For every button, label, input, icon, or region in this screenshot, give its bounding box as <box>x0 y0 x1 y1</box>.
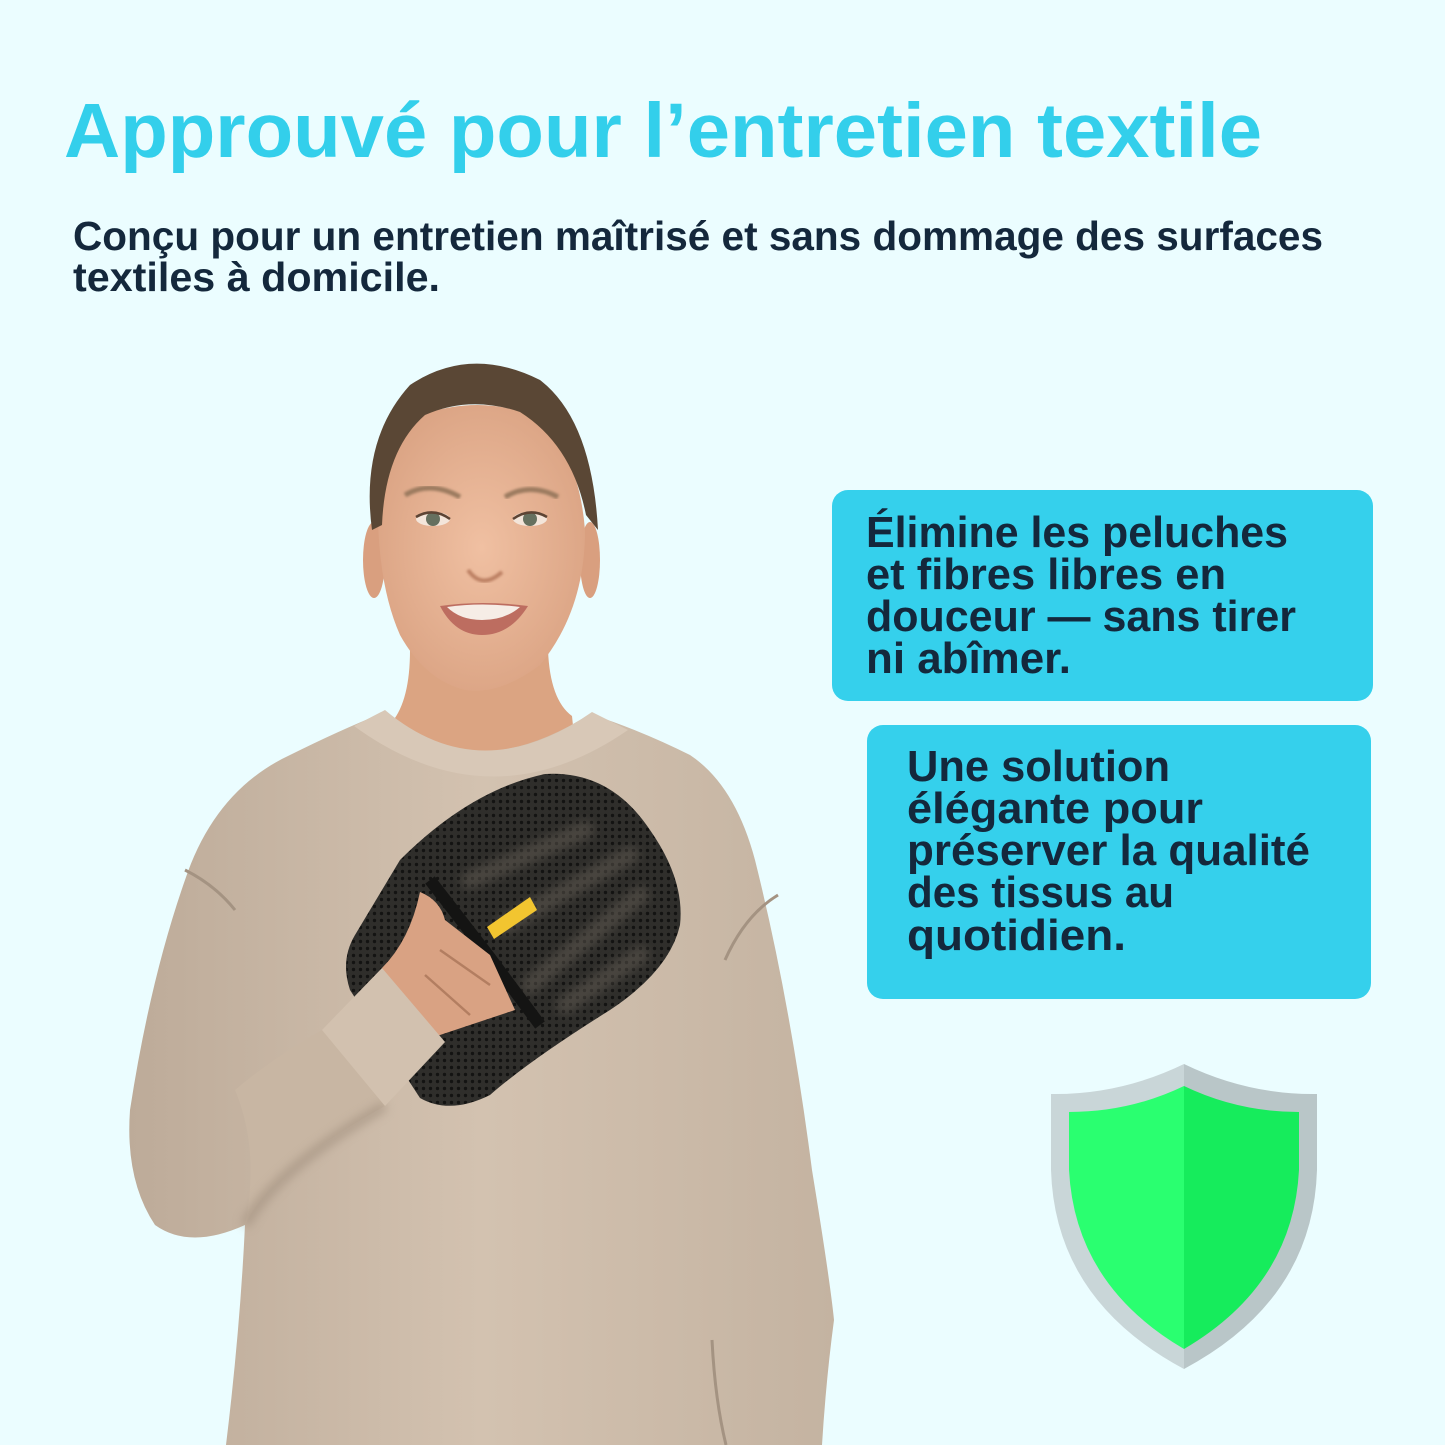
subtitle <box>73 213 1323 300</box>
photo: woman wearing the textile care mitt <box>129 364 834 1445</box>
face <box>378 405 585 691</box>
hair <box>370 364 598 530</box>
mitt strap <box>430 880 540 1025</box>
yellow tab <box>487 897 537 939</box>
subtitle: textiles à domicile. <box>73 254 440 300</box>
cuff <box>322 968 445 1106</box>
icon: green shield <box>1051 1064 1317 1369</box>
mitt finger highlights <box>470 830 640 1005</box>
sweatshirt <box>129 712 834 1445</box>
neck <box>392 650 575 768</box>
mitt <box>346 774 681 1106</box>
subtitle: Conçu pour un entretien maîtrisé et sans dommage des surfaces <box>73 213 1323 259</box>
callout: solution: quotidien. <box>907 911 1126 960</box>
mouth <box>440 603 528 635</box>
title: Approuvé pour l’entretien textile <box>64 88 1262 174</box>
hand knuckle lines <box>425 950 490 1015</box>
callout: peluches: douceur — sans tirer <box>866 592 1296 641</box>
callout: peluches: ni abîmer. <box>866 634 1071 683</box>
callout: peluches: et fibres libres en <box>866 550 1226 599</box>
callout: solution: préserver la qualité <box>907 826 1310 875</box>
callout: solution: Une solution <box>907 742 1170 791</box>
callout: peluches <box>832 490 1373 701</box>
brows <box>405 488 558 497</box>
callout: solution: des tissus au <box>907 868 1174 917</box>
callout: solution: élégante pour <box>907 784 1203 833</box>
nose <box>468 570 502 581</box>
forearm shading <box>235 1030 385 1225</box>
callout: peluches: Élimine les peluches <box>866 507 1288 557</box>
eyes <box>416 512 547 526</box>
callout: solution <box>867 725 1371 999</box>
hand <box>382 892 515 1040</box>
sleeve fold shadows <box>185 870 778 1445</box>
ears <box>363 522 385 598</box>
collar <box>354 710 628 777</box>
